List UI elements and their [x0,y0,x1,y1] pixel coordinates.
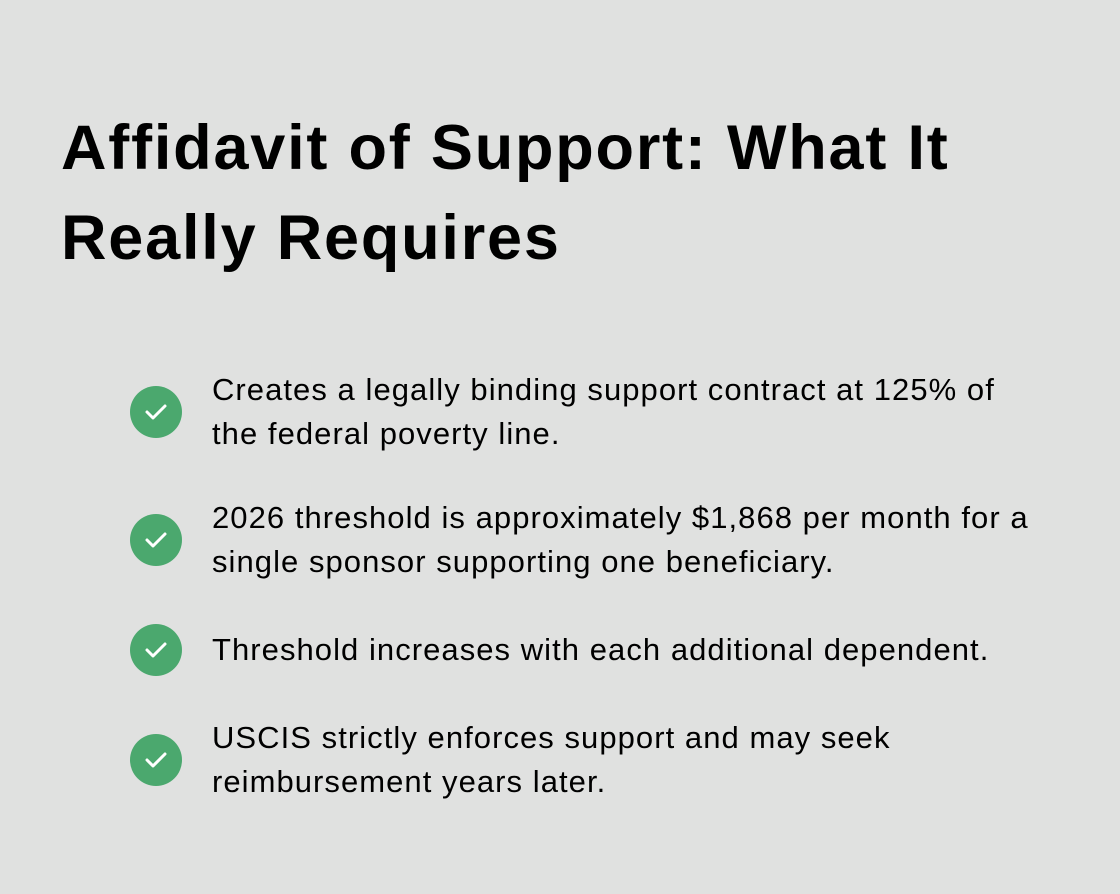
text: Creates a legally binding support contract at 125% of [212,372,995,407]
text: the federal poverty line. [212,416,560,451]
icon: check [130,734,182,786]
title [61,113,950,273]
icon: check [130,386,182,438]
icon: check [130,624,182,676]
text [212,372,995,451]
item: binding contract [130,372,995,451]
text: 2026 threshold is approximately $1,868 per month for a [212,500,1029,535]
item: enforcement [130,720,891,799]
text: USCIS strictly enforces support and may seek [212,720,891,755]
item: threshold amount [130,500,1029,579]
title: Affidavit of Support: What It [61,113,950,183]
text: single sponsor supporting one beneficiary. [212,544,835,579]
item: dependents [130,624,989,676]
title: Really Requires [61,203,561,273]
icon: check [130,514,182,566]
text: Threshold increases with each additional dependent. [212,632,989,667]
text: reimbursement years later. [212,764,606,799]
text [212,720,891,799]
text [212,500,1029,579]
